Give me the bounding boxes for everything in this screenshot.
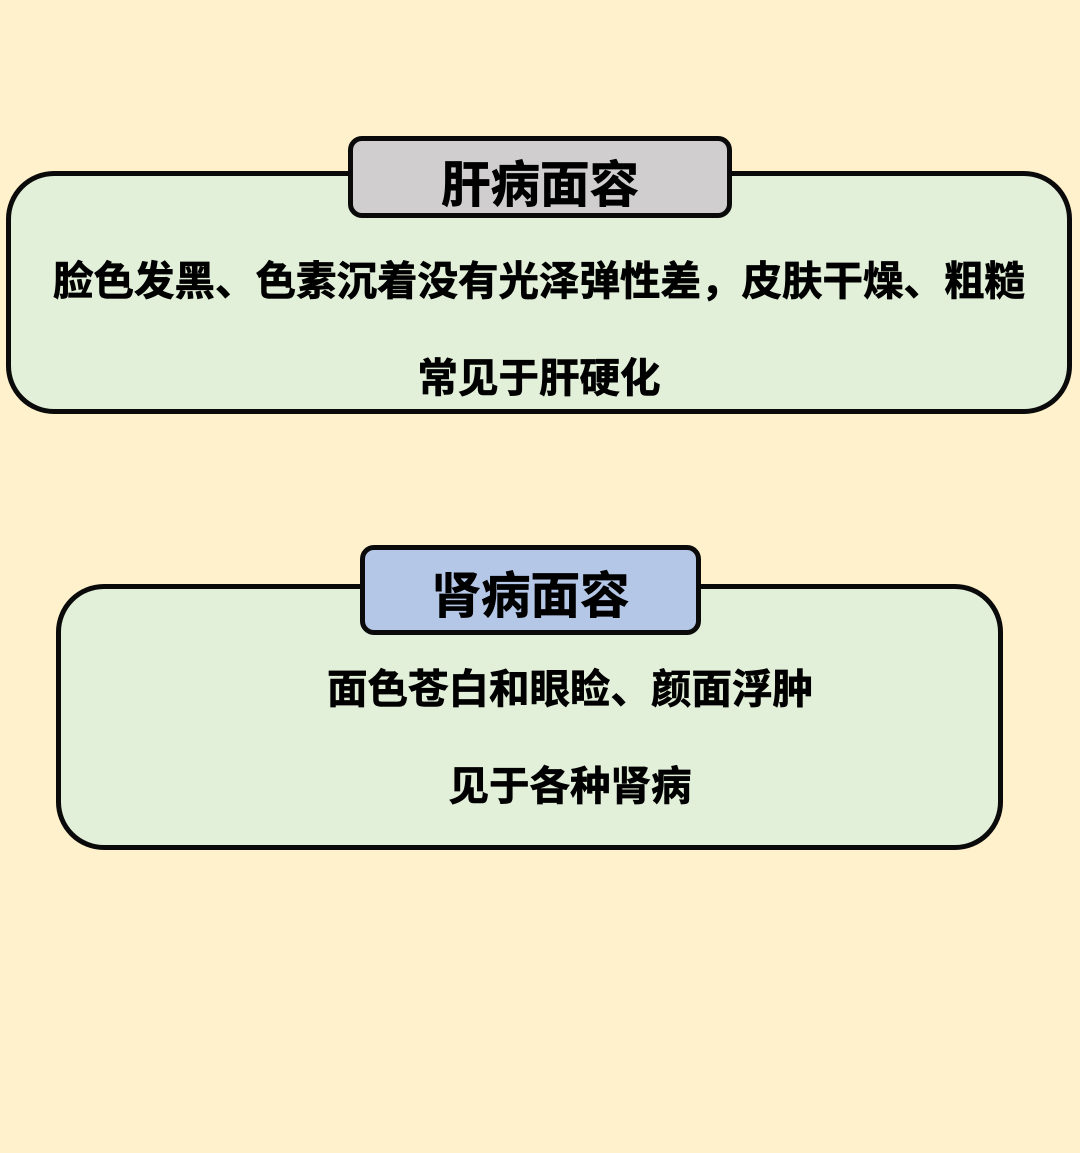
panel: liver disease face [6,171,1072,414]
text: kidney description line 1: 面色苍白和眼睑、颜面浮肿 [327,666,813,712]
text: liver description line 2: 常见于肝硬化 [418,354,660,400]
heading: kidney disease face [360,545,701,635]
heading: kidney disease face: 肾病面容 [432,569,630,624]
text: kidney description line 2: 见于各种肾病 [448,762,692,808]
panel: kidney disease face [56,584,1003,850]
heading: liver disease face: 肝病面容 [441,158,639,213]
text: liver description line 1: 脸色发黑、色素沉着没有光泽弹性差，皮肤干燥、粗糙 [53,258,1025,304]
heading: liver disease face [348,136,732,218]
